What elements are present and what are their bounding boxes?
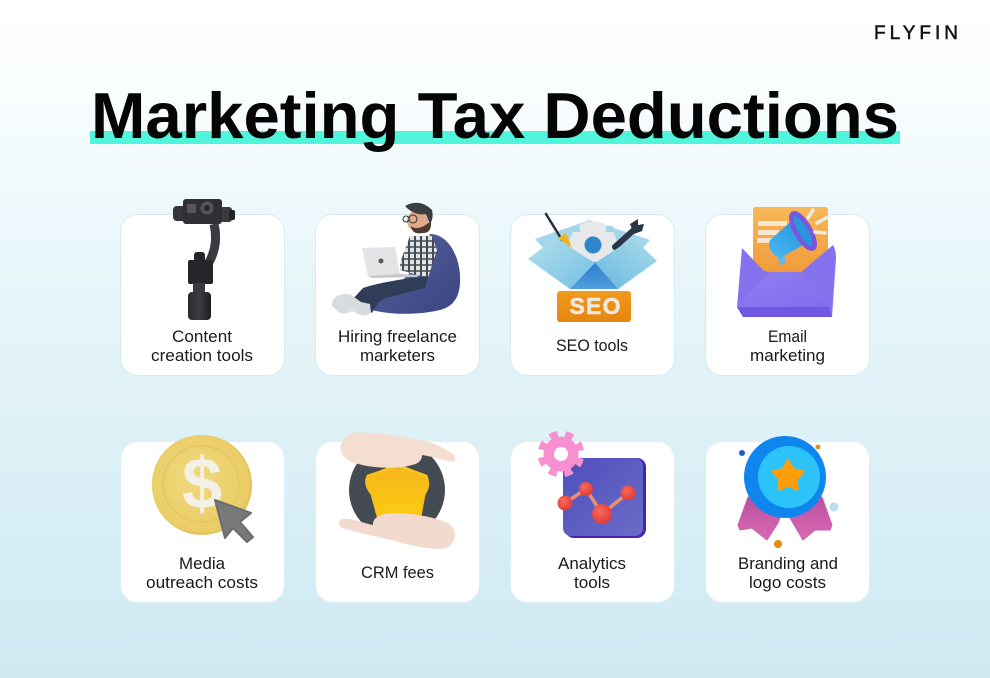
card [316, 214, 480, 376]
label: outreach costs [146, 574, 258, 592]
panel: email marketing [706, 207, 870, 376]
card [510, 442, 674, 602]
panel: branding and logo costs [706, 436, 870, 602]
label: marketing [750, 347, 825, 365]
icon: SEO box with tools: SEO [570, 293, 620, 319]
icon: SEO box with tools [528, 214, 657, 322]
panel: content creation tools [120, 199, 284, 376]
panel: hiring freelance marketers [316, 203, 480, 376]
panel: SEO tools [510, 214, 674, 376]
icon: envelope with megaphone [737, 207, 836, 317]
label: SEO tools [556, 337, 628, 355]
label: Analytics [558, 555, 626, 573]
icon: hands holding star [338, 433, 455, 549]
panel: analytics tools [510, 430, 674, 602]
card [120, 442, 284, 602]
icon: coin with cursor [152, 435, 253, 542]
logo: FLYFIN: FLYFIN [874, 23, 958, 44]
icon: man on beanbag with laptop [332, 203, 460, 316]
label: Email [768, 328, 807, 346]
title text: Marketing Tax Deductions [91, 79, 899, 152]
label [750, 328, 825, 365]
label [338, 328, 457, 365]
icon: camera gimbal [173, 199, 235, 320]
label: Branding and [738, 555, 838, 573]
label [558, 555, 626, 592]
panel: CRM fees [316, 433, 480, 602]
label: marketers [360, 347, 435, 365]
card [510, 214, 674, 376]
title with highlight [90, 79, 900, 152]
label: Media [179, 555, 226, 573]
card [706, 214, 870, 376]
label: creation tools [151, 347, 253, 365]
title highlight bar [90, 131, 900, 144]
label: tools [574, 574, 610, 592]
card [316, 442, 480, 602]
icon: medal with star [738, 436, 838, 548]
label: logo costs [749, 574, 826, 592]
label [151, 328, 253, 365]
label: Hiring freelance [338, 328, 457, 346]
card [120, 214, 284, 376]
label: CRM fees [361, 564, 434, 582]
icon: coin with cursor: $ [182, 444, 222, 524]
icon: chart tile with gear [537, 430, 646, 538]
label [738, 555, 838, 592]
label [146, 555, 258, 592]
panel: media outreach costs [120, 435, 284, 602]
card [706, 442, 870, 602]
label: Content [172, 328, 232, 346]
